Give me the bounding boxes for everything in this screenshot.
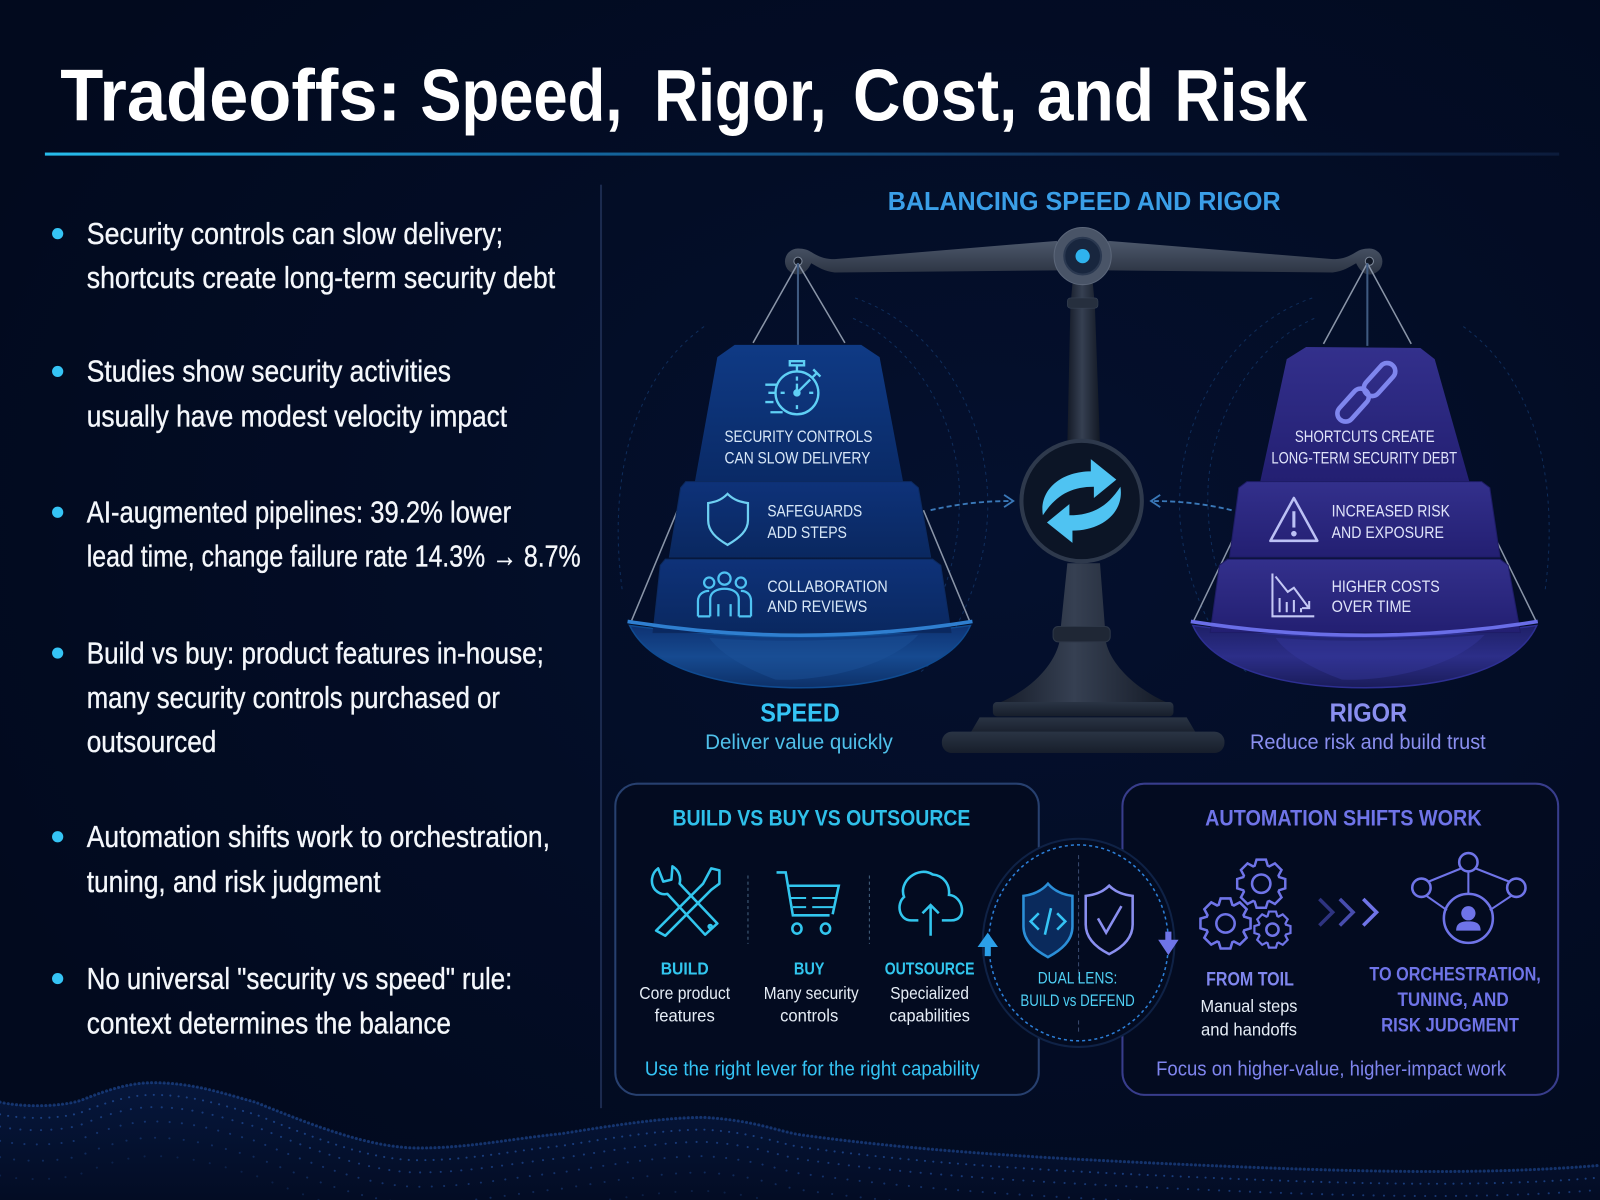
- icon: sync arrows: [1042, 459, 1121, 543]
- icon: orchestration network: [1412, 853, 1526, 943]
- weight: security controls: SECURITY CONTROLS: [724, 428, 873, 446]
- weight: security controls: CAN SLOW DELIVERY: [724, 449, 871, 467]
- column: to orchestration: TO ORCHESTRATION,: [1369, 964, 1541, 986]
- column: buy: [764, 958, 859, 1025]
- scale beam: [785, 241, 1382, 274]
- arrow down: [1158, 932, 1179, 955]
- arrow: speed to center: [931, 495, 1013, 510]
- pan left: [630, 626, 970, 688]
- bullet 4: outsourced: [87, 725, 216, 759]
- panel caption: Use the right lever for the right capability: [645, 1059, 980, 1081]
- weight: increased risk: [1230, 482, 1500, 557]
- weight: shortcuts: SHORTCUTS CREATE: [1295, 428, 1435, 446]
- scale base: [942, 563, 1224, 753]
- bullet 5: tuning, and risk judgment: [87, 865, 381, 899]
- dual lens badge: [978, 839, 1179, 1047]
- column: to orchestration: [1369, 964, 1541, 1037]
- column: outsource: [885, 958, 974, 1025]
- icon: code shield: [1023, 884, 1072, 957]
- left weights and pan: [628, 263, 972, 688]
- bullet 4: [52, 636, 544, 759]
- column divider: [600, 185, 602, 1108]
- pan right: [1193, 626, 1537, 688]
- speed label: SPEED: [760, 699, 840, 727]
- column: from toil: Manual steps: [1201, 996, 1298, 1016]
- bullet 4: Build vs buy: product features in-house;: [87, 636, 544, 670]
- panel: automation shifts work: [1122, 784, 1558, 1095]
- center sync badge: [1021, 441, 1142, 561]
- column: build: features: [655, 1005, 715, 1025]
- bullet 4: many security controls purchased or: [87, 681, 500, 715]
- icon: chevrons: [1319, 899, 1377, 926]
- rigor label: Reduce risk and build trust: [1250, 730, 1486, 754]
- column: buy: Many security: [764, 983, 859, 1003]
- weight: collaboration: AND REVIEWS: [767, 598, 867, 616]
- weight: shortcuts: LONG-TERM SECURITY DEBT: [1271, 449, 1457, 467]
- bullet 1: shortcuts create long-term security debt: [87, 261, 556, 295]
- bullet list: [52, 217, 581, 1041]
- speed label: [705, 699, 893, 754]
- bullet 2: usually have modest velocity impact: [87, 400, 508, 434]
- column: outsource: Specialized: [890, 983, 969, 1003]
- bullet 2: Studies show security activities: [87, 355, 451, 389]
- badge label: [1020, 970, 1135, 1010]
- icon: warning: [1270, 498, 1317, 541]
- arrow up: [978, 933, 998, 956]
- strings right: [1194, 263, 1536, 620]
- weight: collaboration: COLLABORATION: [767, 578, 888, 596]
- rigor label: [1250, 699, 1486, 754]
- bullet 6: [52, 962, 512, 1041]
- column: build: BUILD: [661, 958, 709, 978]
- weight: shortcuts: [1260, 347, 1469, 482]
- column: from toil: FROM TOIL: [1206, 969, 1294, 991]
- title: Speed,: [420, 53, 622, 136]
- badge label: BUILD vs DEFEND: [1020, 992, 1135, 1010]
- column: to orchestration: TUNING, AND: [1397, 989, 1509, 1011]
- pan rim left: [628, 621, 972, 635]
- right weights and pan: [1191, 263, 1538, 688]
- icon: gears: [1200, 860, 1290, 949]
- icon: check shield: [1086, 886, 1133, 954]
- column: outsource: capabilities: [889, 1005, 970, 1025]
- arrow: rigor to center: [1151, 495, 1232, 510]
- icon: declining chart: [1272, 573, 1314, 616]
- bullet 3: AI-augmented pipelines: 39.2% lower: [87, 495, 511, 529]
- column: build: [639, 958, 730, 1025]
- title: Cost,: [853, 53, 1017, 136]
- column: buy: BUY: [794, 958, 825, 978]
- speed label: Deliver value quickly: [705, 730, 893, 754]
- title: Rigor,: [654, 53, 827, 136]
- icon: cloud upload: [900, 872, 962, 936]
- panel: build vs buy vs outsource: [615, 784, 1039, 1095]
- column: from toil: and handoffs: [1201, 1020, 1297, 1040]
- panel heading: AUTOMATION SHIFTS WORK: [1205, 806, 1482, 831]
- title: [60, 53, 1307, 136]
- rigor label: RIGOR: [1330, 699, 1407, 727]
- weight: safeguards: ADD STEPS: [767, 524, 847, 542]
- bullet 6: No universal "security vs speed" rule:: [87, 962, 512, 996]
- weight: higher costs: HIGHER COSTS: [1332, 578, 1440, 596]
- weight: safeguards: SAFEGUARDS: [767, 502, 862, 520]
- scale hub: [1054, 228, 1111, 285]
- bullet 3: [52, 495, 581, 573]
- weight: increased risk: INCREASED RISK: [1332, 502, 1450, 520]
- icon: people: [698, 572, 751, 616]
- strings left: [632, 263, 969, 620]
- separator: [748, 876, 869, 944]
- column: build: Core product: [639, 983, 730, 1003]
- column: outsource: OUTSOURCE: [885, 958, 974, 978]
- balance scale: [785, 228, 1382, 753]
- icon: shield: [708, 494, 748, 545]
- bullet 5: [52, 820, 550, 899]
- scale post: [1067, 284, 1100, 444]
- weight: safeguards: [669, 482, 931, 557]
- weight: security controls: [695, 345, 903, 482]
- column: to orchestration: RISK JUDGMENT: [1381, 1015, 1519, 1037]
- icon: stopwatch: [765, 361, 820, 414]
- bullet 1: [52, 217, 556, 295]
- icon: chain link: [1334, 360, 1399, 425]
- column: from toil: [1201, 969, 1298, 1040]
- title: Tradeoffs:: [60, 53, 401, 136]
- title rule: [45, 153, 1559, 156]
- badge label: DUAL LENS:: [1038, 970, 1117, 988]
- title: and: [1037, 53, 1154, 136]
- scale heading: BALANCING SPEED AND RIGOR: [888, 188, 1281, 216]
- panel heading: BUILD VS BUY VS OUTSOURCE: [672, 806, 970, 831]
- weight: collaboration: [653, 559, 951, 633]
- bullet 6: context determines the balance: [87, 1007, 451, 1041]
- background wave: [0, 1083, 1600, 1200]
- bullet 3: lead time, change failure rate 14.3% → 8.7%: [87, 539, 581, 573]
- icon: tools: [652, 866, 719, 936]
- bullet 5: Automation shifts work to orchestration,: [87, 820, 550, 854]
- weight: higher costs: OVER TIME: [1332, 598, 1411, 616]
- weight: increased risk: AND EXPOSURE: [1332, 524, 1444, 542]
- icon: cart: [777, 872, 839, 934]
- decorative arcs: [618, 298, 1549, 673]
- bullet 1: Security controls can slow delivery;: [87, 217, 503, 251]
- pan rim right: [1191, 621, 1538, 635]
- panel caption: Focus on higher-value, higher-impact work: [1156, 1059, 1507, 1081]
- column: buy: controls: [780, 1005, 839, 1025]
- weight: higher costs: [1210, 559, 1520, 633]
- title: Risk: [1174, 53, 1307, 136]
- bullet 2: [52, 355, 508, 434]
